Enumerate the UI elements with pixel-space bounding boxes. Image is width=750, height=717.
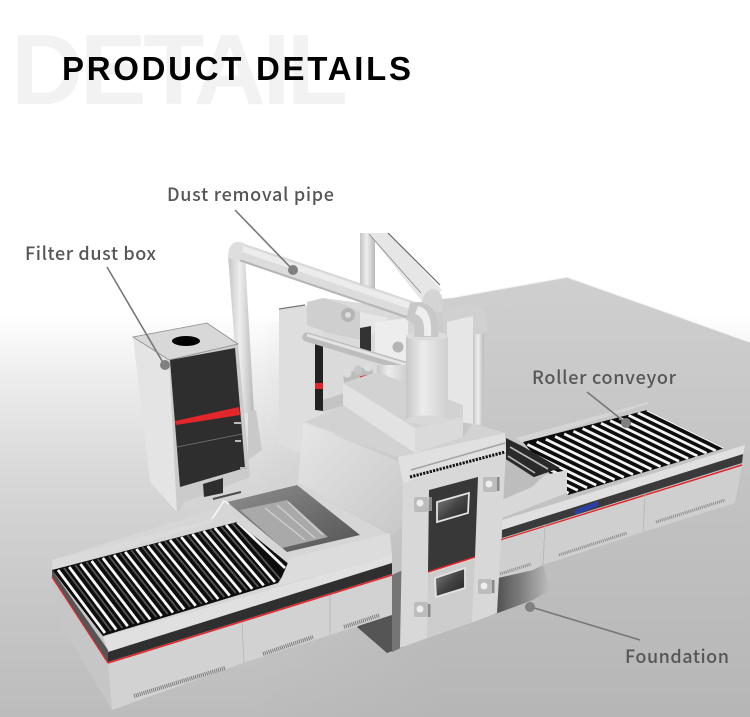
box left face: [133, 337, 177, 512]
right upright ducts: [443, 302, 488, 428]
label: Foundation: [525, 602, 729, 669]
foundation pit: [357, 565, 550, 653]
red stripe: [175, 407, 240, 425]
label: Foundation: Foundation: [625, 643, 729, 669]
conveyor top surface: [52, 483, 392, 640]
small cylinder: [377, 365, 406, 404]
top rail: [502, 445, 745, 530]
base panels: [108, 576, 392, 710]
label: Dust removal pipe: [167, 181, 334, 275]
rollers: [526, 410, 725, 494]
lower tab: [203, 478, 223, 497]
red line: [108, 575, 392, 663]
floor: [335, 276, 750, 664]
black band: [108, 563, 392, 662]
box top opening: [172, 336, 200, 346]
vents: [500, 500, 725, 574]
valve block: [342, 342, 404, 390]
slope panel: [278, 533, 392, 586]
large cylinder: [406, 332, 448, 424]
hopper glass: [227, 485, 360, 552]
right roller conveyor: [491, 402, 745, 578]
machine assembly: [228, 233, 488, 460]
left side face: [52, 570, 108, 663]
black door panel: [428, 477, 478, 572]
clamp: [483, 477, 500, 492]
rollers: [58, 520, 291, 633]
rear vertical pipe: [360, 233, 375, 300]
plinth: [343, 372, 463, 455]
door handles: [234, 423, 247, 468]
slope interior: [502, 458, 540, 500]
label: Filter dust box: [25, 240, 170, 370]
label: Dust removal pipe: Dust removal pipe: [167, 181, 334, 207]
tower bevel: [398, 433, 506, 483]
left roller conveyor: [52, 483, 392, 710]
tower side wall: [298, 423, 403, 535]
clamp: [414, 497, 432, 512]
box front frame: [169, 344, 250, 513]
box top: [133, 323, 238, 360]
blue logo mark: [575, 501, 598, 515]
title: PRODUCT DETAILS: [62, 50, 411, 87]
black door panel: [170, 348, 245, 487]
small bed by tower: [506, 438, 560, 482]
background word: DETAIL: DETAIL: [11, 14, 348, 126]
label: Roller conveyor: [532, 364, 677, 428]
clamp: [478, 579, 494, 594]
upper diagonal pipe: [368, 233, 443, 312]
red line: [428, 557, 475, 572]
central tower: [298, 405, 506, 652]
slope panel: [502, 470, 567, 518]
dust removal pipe: [228, 242, 439, 337]
left vertical pipe: [228, 256, 262, 460]
label: Roller conveyor: Roller conveyor: [532, 364, 677, 390]
roller bed: [52, 522, 290, 636]
lower panel: [427, 559, 475, 638]
horizontal lower pipe: [307, 335, 407, 367]
door seam: [177, 434, 242, 447]
back rail: [515, 402, 648, 443]
label: Filter dust box: Filter dust box: [25, 240, 157, 266]
tower top surface: [305, 405, 505, 457]
filter dust box: [133, 323, 250, 513]
white chevron: [212, 501, 229, 519]
rear machine column: [307, 298, 408, 412]
back cabinet: [279, 305, 335, 460]
upper window: [437, 493, 469, 522]
vents: [134, 615, 380, 696]
roller bed: [523, 410, 725, 495]
lower window: [435, 568, 465, 597]
back rail: [52, 519, 214, 570]
base panels: [498, 466, 742, 578]
clamp: [414, 602, 430, 617]
perforation row: [410, 452, 505, 477]
tower front: [400, 452, 506, 648]
red line: [501, 465, 742, 540]
top rail: [103, 555, 392, 652]
black band: [502, 454, 743, 538]
